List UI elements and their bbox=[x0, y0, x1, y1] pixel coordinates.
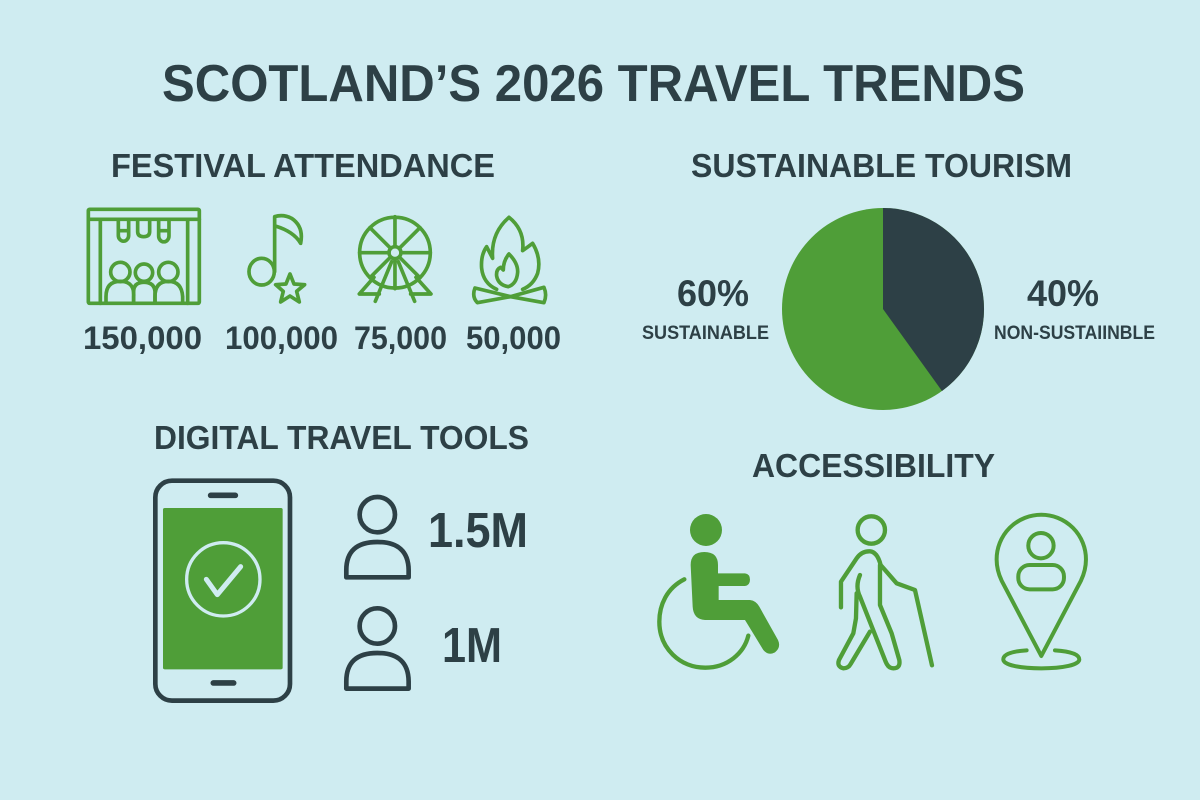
value: 100,000: 100,000 bbox=[225, 320, 338, 356]
value: 75,000: 75,000 bbox=[354, 320, 447, 356]
label: 60% sustainable: SUSTAINABLE bbox=[642, 323, 769, 344]
panel: sustainable tourism bbox=[642, 147, 1155, 410]
icon: user, 1M bbox=[346, 608, 409, 689]
value: 1.5M: 1.5M bbox=[428, 504, 528, 558]
label: 60% sustainable: 60% bbox=[677, 273, 749, 314]
label: 40% non-sustainable: NON-SUSTAIINBLE bbox=[994, 323, 1155, 344]
icon: ferris wheel bbox=[359, 217, 431, 301]
icon: music note with star bbox=[249, 216, 305, 302]
icon: person walking with cane bbox=[838, 516, 932, 668]
icon: campfire bbox=[474, 217, 546, 303]
value: 1M: 1M bbox=[442, 619, 502, 673]
heading: sustainable tourism: SUSTAINABLE TOURISM bbox=[691, 147, 1072, 184]
icon: wheelchair user bbox=[659, 514, 779, 668]
pie chart bbox=[782, 208, 984, 410]
title: SCOTLAND’S 2026 TRAVEL TRENDS bbox=[162, 55, 1025, 113]
icon: location pin with person bbox=[997, 515, 1086, 668]
value: 50,000: 50,000 bbox=[466, 320, 561, 356]
panel: festival attendance bbox=[83, 147, 561, 356]
value: 150,000: 150,000 bbox=[83, 320, 202, 356]
heading: accessibility: ACCESSIBILITY bbox=[752, 447, 995, 484]
label: 40% non-sustainable: 40% bbox=[1027, 273, 1099, 314]
icon: user, 1.5M bbox=[346, 497, 409, 577]
panel: digital travel tools bbox=[154, 419, 529, 701]
heading: festival attendance: FESTIVAL ATTENDANCE bbox=[111, 147, 495, 184]
label: 60% sustainable bbox=[642, 273, 769, 344]
label: 40% non-sustainable bbox=[994, 273, 1155, 344]
panel: accessibility bbox=[659, 447, 1086, 668]
icon: smartphone with check bbox=[155, 481, 290, 701]
icon: stage with audience bbox=[88, 209, 199, 303]
heading: digital travel tools: DIGITAL TRAVEL TOOLS bbox=[154, 419, 529, 456]
